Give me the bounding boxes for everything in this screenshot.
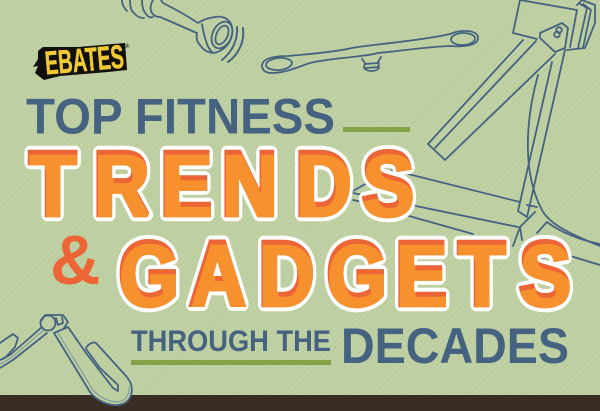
logo backing shape bbox=[33, 43, 127, 80]
ampersand: & bbox=[50, 221, 101, 299]
subheading: decades: DECADES bbox=[341, 317, 569, 374]
logo wordmark: EBATES bbox=[43, 38, 125, 81]
subheading: through the: THROUGH THE bbox=[131, 325, 331, 358]
heading: top fitness: TOP FITNESS bbox=[26, 88, 335, 144]
icon: shake weight dumbbell bbox=[122, 0, 243, 62]
heading: gadgets: GADGETS bbox=[119, 222, 570, 324]
icon: exercise machine frame bbox=[353, 0, 600, 265]
heading: trends: TRENDS bbox=[29, 132, 413, 234]
icon: twist bar bbox=[262, 31, 478, 73]
registered mark: ® bbox=[125, 43, 130, 50]
icon: ab clip exerciser bbox=[0, 315, 132, 405]
footer band bbox=[0, 395, 600, 411]
logo: Ebates bbox=[33, 38, 130, 81]
heading: trends: TRENDS bbox=[31, 137, 415, 239]
accent bar bottom bbox=[131, 360, 331, 365]
heading: trends: TRENDS bbox=[29, 132, 413, 234]
accent bar top bbox=[343, 127, 410, 132]
heading: gadgets: GADGETS bbox=[120, 227, 572, 329]
heading: gadgets: GADGETS bbox=[119, 222, 570, 324]
